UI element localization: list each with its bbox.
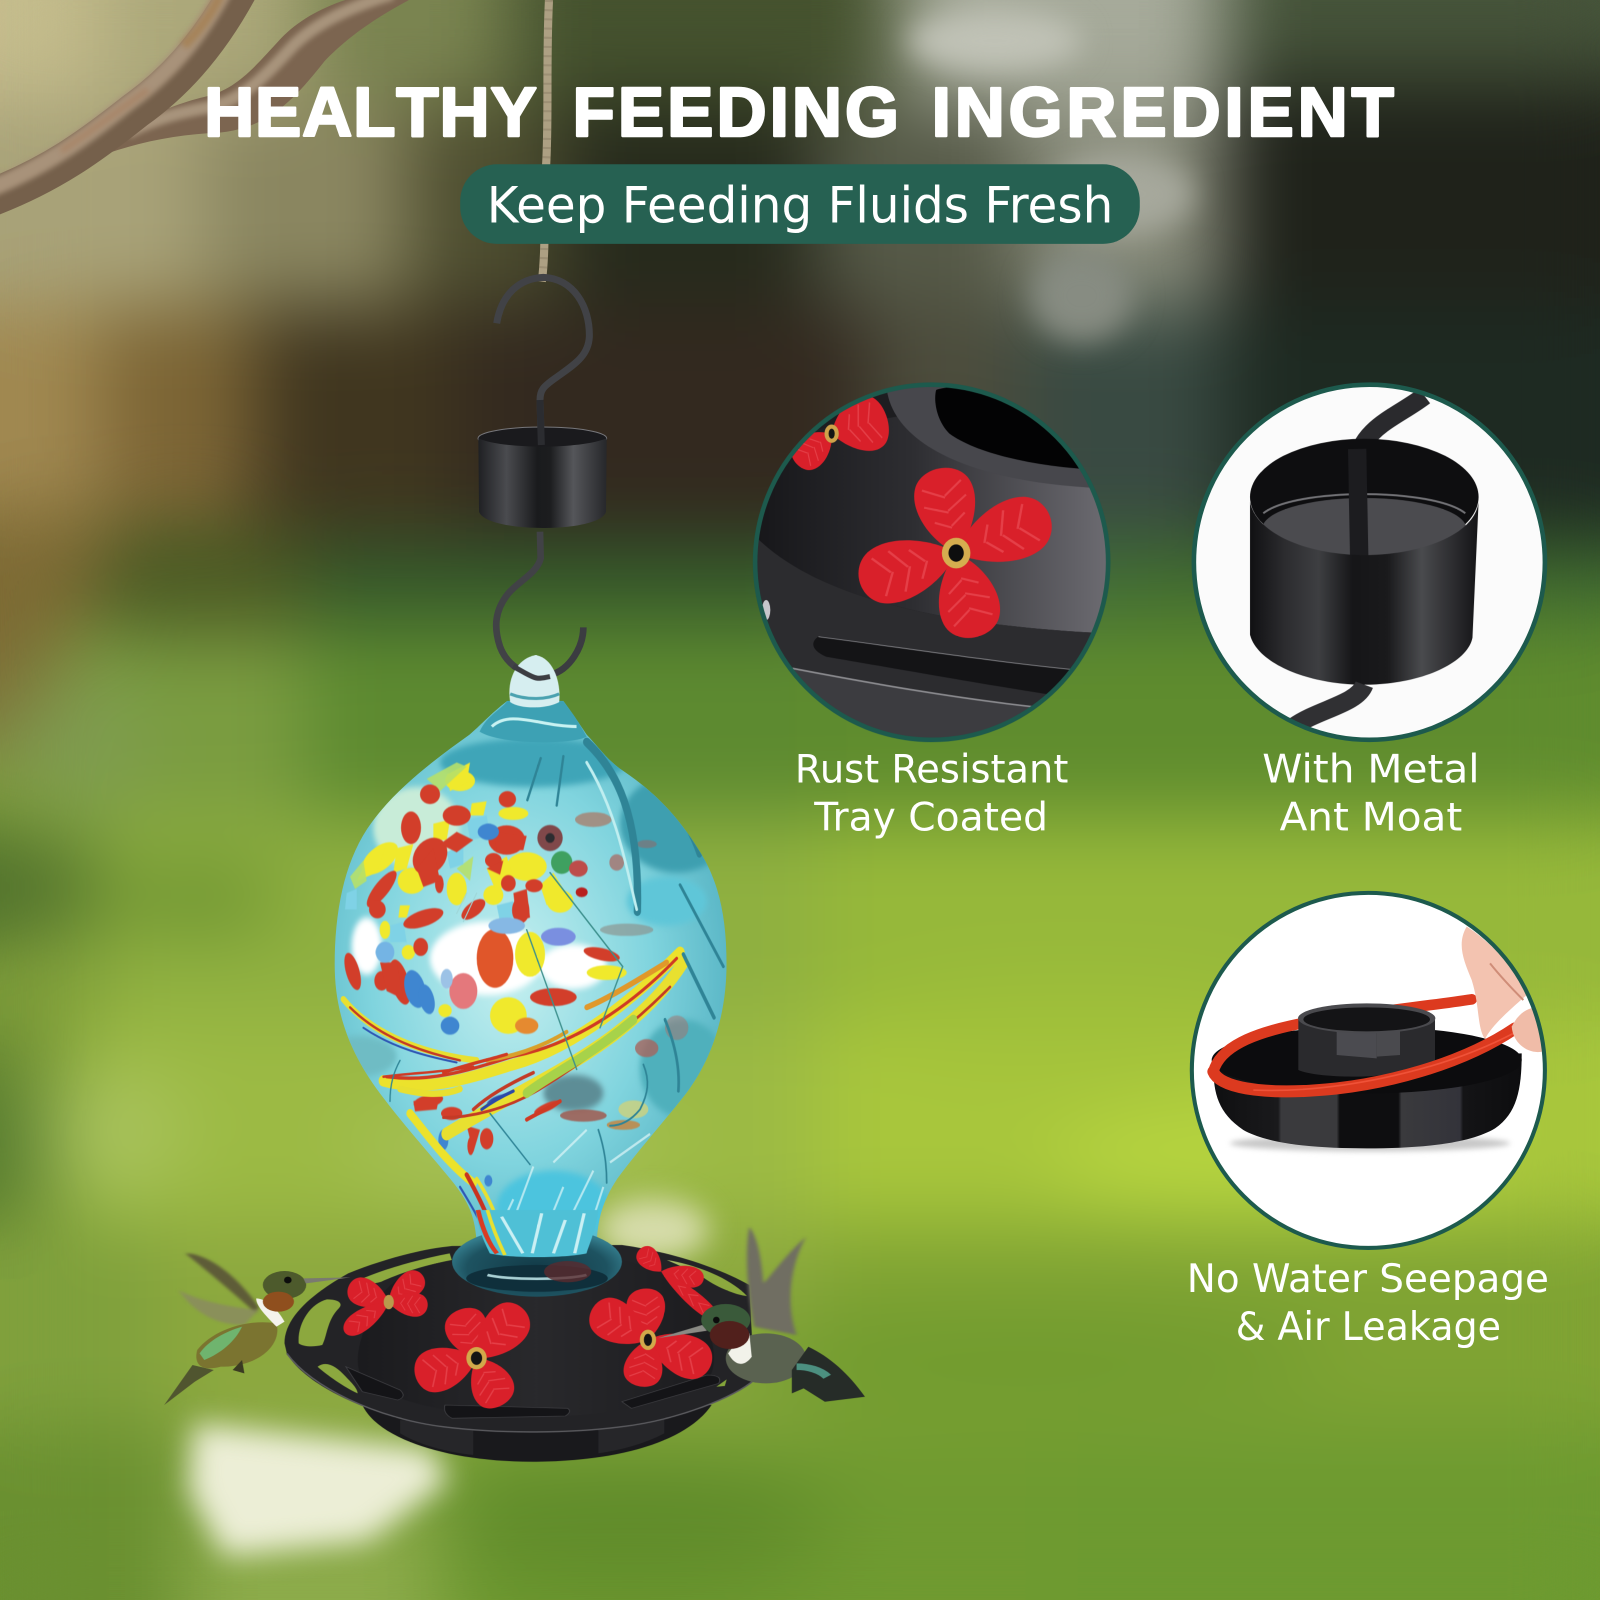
small flower xyxy=(792,397,890,470)
tray plate with cut-outs xyxy=(285,1245,754,1432)
right hummingbird xyxy=(657,1227,865,1402)
title: INGREDIENT xyxy=(932,73,1394,151)
inset: rust resistant tray xyxy=(740,383,1117,743)
red ring front xyxy=(1213,1028,1515,1091)
title: FEEDING xyxy=(572,73,899,151)
flower: back left xyxy=(339,1265,430,1341)
left hummingbird xyxy=(164,1253,351,1405)
tree branches xyxy=(0,0,429,200)
caption: rust resistant: Rust Resistant xyxy=(795,748,1068,793)
subtitle pill xyxy=(460,164,1140,244)
center cup xyxy=(1298,1020,1435,1077)
tray band xyxy=(758,540,1091,706)
ant moat cup xyxy=(478,400,607,528)
tray lip line xyxy=(287,1353,754,1432)
inset: silicone seal xyxy=(1192,893,1547,1248)
subtitle pill: Keep Feeding Fluids Fresh xyxy=(487,176,1113,234)
large flower xyxy=(858,468,1052,638)
flower: back right xyxy=(632,1242,723,1325)
glass collar xyxy=(452,1227,622,1297)
red ring back xyxy=(1213,999,1472,1072)
hook and ant moat xyxy=(478,277,607,675)
hanging twine xyxy=(542,0,549,282)
inset: metal ant moat xyxy=(1194,385,1545,740)
caption: metal ant moat: With Metal xyxy=(1262,748,1480,793)
lower tray bowl xyxy=(362,1405,712,1462)
caption: no seepage: No Water Seepage xyxy=(1187,1257,1549,1302)
flower: front right xyxy=(582,1287,718,1389)
feeder base xyxy=(285,1210,754,1462)
caption: rust resistant: Tray Coated xyxy=(813,796,1048,841)
glass bulb xyxy=(323,701,733,1244)
title: HEALTHY xyxy=(204,73,537,151)
caption: no seepage: & Air Leakage xyxy=(1236,1305,1501,1350)
glass top knob xyxy=(480,655,587,742)
dark opening xyxy=(935,388,1079,469)
flower: front left xyxy=(409,1294,539,1415)
tray slots xyxy=(346,1367,720,1418)
tray xyxy=(1213,1053,1522,1148)
dome area xyxy=(848,416,1106,633)
caption: metal ant moat: Ant Moat xyxy=(1280,796,1462,841)
fingers xyxy=(1462,927,1527,1039)
ring around opening xyxy=(887,387,1089,488)
dome xyxy=(358,1260,714,1417)
